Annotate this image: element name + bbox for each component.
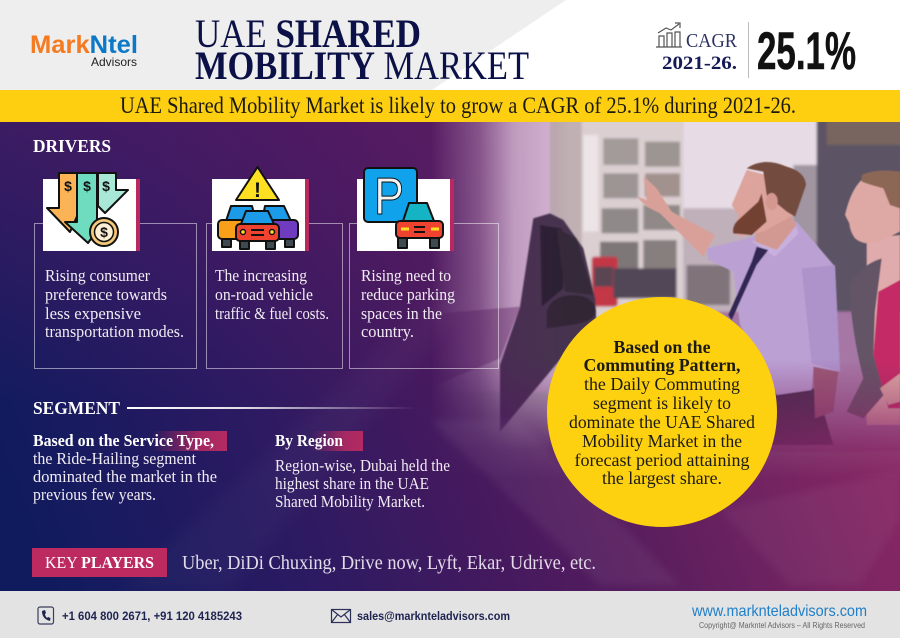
icon: traffic warning cars: !: [254, 179, 261, 202]
driver 2 text: traffic & fuel costs.: [215, 304, 329, 323]
CAGR block: 2021-26.: [662, 53, 737, 74]
driver 1 text: Rising consumer: [45, 266, 150, 285]
driver 2 text: The increasing: [215, 266, 307, 285]
icon: falling dollar arrows: $: [64, 178, 72, 194]
callout: commuting pattern: segment is likely to: [593, 393, 731, 413]
callout: commuting pattern: Mobility Market in the: [582, 431, 742, 451]
text block: by region: highest share in the UAE: [275, 474, 429, 493]
icon: falling dollar arrows: $: [83, 178, 91, 194]
logo: MarkNtel Advisors: MarkNtel: [30, 31, 138, 59]
icon: falling dollar arrows: $: [102, 178, 110, 194]
yellow banner: [0, 90, 900, 122]
yellow banner: UAE Shared Mobility Market is likely to grow a CAGR of 25.1% during 2021-26.: [120, 93, 796, 118]
photo: man and woman beside a car: [438, 122, 900, 464]
callout: commuting pattern: Commuting Pattern,: [584, 355, 740, 375]
text block: by region: Region-wise, Dubai held the: [275, 456, 450, 475]
panel: driver 3: [350, 168, 498, 368]
text block: service type: Based on the Service Type,: [33, 431, 214, 450]
driver 2 text: [215, 266, 329, 323]
driver 3 text: spaces in the: [361, 304, 442, 323]
heading: drivers: DRIVERS: [33, 136, 111, 156]
key players: [32, 548, 596, 577]
header background: [0, 0, 900, 90]
key players: KEY PLAYERS: [45, 553, 154, 572]
text block: service type: dominated the market in the: [33, 467, 217, 486]
text block: by region: Shared Mobility Market.: [275, 492, 425, 511]
callout: commuting pattern: Based on the: [614, 337, 711, 357]
driver 3 text: reduce parking: [361, 285, 455, 304]
footer: +1 604 800 2671, +91 120 4185243: [62, 609, 242, 623]
footer: sales@marknteladvisors.com: [357, 609, 510, 623]
text block: service type: the Ride-Hailing segment: [33, 449, 196, 468]
logo: MarkNtel Advisors: Advisors: [91, 55, 137, 69]
driver 2 text: on-road vehicle: [215, 285, 313, 304]
CAGR block: CAGR: [686, 30, 738, 52]
text block: service type: [33, 431, 227, 504]
footer: www.marknteladvisors.com: [691, 603, 867, 620]
footer: Copyright@ Markntel Advisors – All Rights Reserved: [699, 621, 865, 630]
title: [195, 11, 529, 88]
panel: driver 2: [206, 167, 342, 368]
driver 1 text: [45, 266, 184, 341]
icon: parking sign and car: P: [374, 168, 404, 226]
icon: envelope: [332, 610, 350, 622]
car: [448, 212, 598, 431]
text block: service type: previous few years.: [33, 485, 156, 504]
icon: falling dollar arrows: [43, 173, 140, 251]
callout: commuting pattern: dominate the UAE Shared: [569, 412, 755, 432]
icon: traffic warning cars: [212, 167, 309, 251]
text block: by region: [275, 431, 450, 511]
main gradient background: [0, 122, 900, 591]
footer: [0, 591, 900, 638]
panel: driver 1: [34, 173, 196, 368]
callout: commuting pattern: [547, 297, 777, 527]
key players: Uber, DiDi Chuxing, Drive now, Lyft, Ekar, Udrive, etc.: [182, 552, 596, 574]
text block: by region: By Region: [275, 431, 343, 450]
callout: commuting pattern: forecast period attaining: [574, 450, 750, 470]
title: UAE SHARED: [195, 11, 421, 56]
driver 1 text: transportation modes.: [45, 322, 184, 341]
man: [637, 162, 840, 445]
icon: growth chart: [656, 23, 682, 47]
driver 3 text: Rising need to: [361, 266, 451, 285]
driver 3 text: [361, 266, 455, 341]
driver 3 text: country.: [361, 322, 414, 341]
driver 1 text: less expensive: [45, 304, 141, 323]
driver 1 text: preference towards: [45, 285, 167, 304]
woman: [845, 171, 900, 425]
callout: commuting pattern: the largest share.: [602, 468, 722, 488]
title: MOBILITY MARKET: [195, 43, 529, 88]
callout: commuting pattern: the Daily Commuting: [584, 374, 740, 394]
icon: phone: [38, 607, 54, 624]
icon: falling dollar arrows: $: [100, 224, 108, 240]
heading: segment: SEGMENT: [33, 398, 120, 418]
CAGR block: [656, 22, 856, 81]
icon: parking sign and car: [357, 168, 454, 251]
